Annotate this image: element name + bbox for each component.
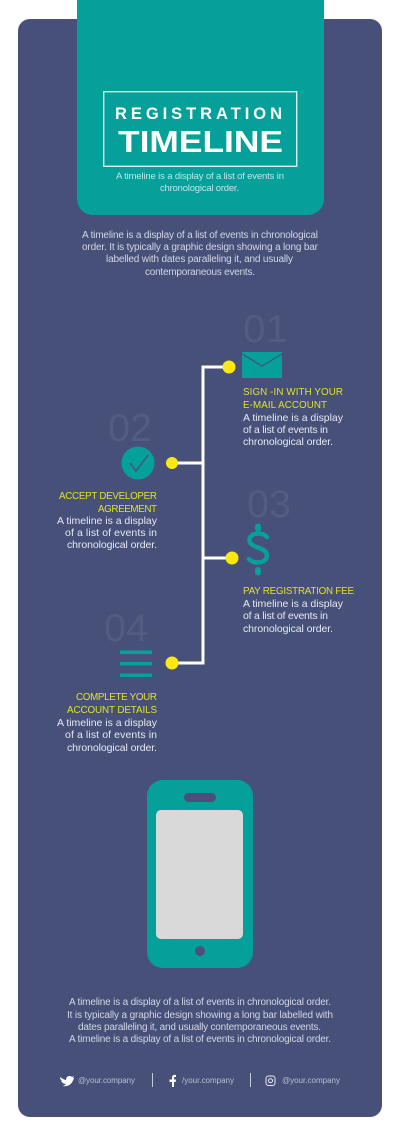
step 03 <box>243 483 354 635</box>
step 03 text: chronological order. <box>243 623 333 635</box>
step 04 text: A timeline is a display <box>57 717 158 729</box>
header subtitle: chronological order. <box>160 183 239 194</box>
step 04 text: COMPLETE YOUR <box>76 692 157 703</box>
intro text: contemporaneous events. <box>145 267 255 278</box>
icon: menu lines <box>120 650 152 677</box>
footer text: dates paralleling it, and usually contemporaneous events. <box>78 1022 321 1033</box>
header subtitle: A timeline is a display of a list of events in <box>116 171 284 182</box>
intro text: order. It is typically a graphic design showing a long bar <box>82 242 319 253</box>
intro text: A timeline is a display of a list of events in chronological <box>82 230 318 241</box>
header subtitle <box>116 171 284 194</box>
step 04 text: of a list of events in <box>65 729 157 741</box>
social bar <box>60 1073 340 1087</box>
icon: check circle <box>122 446 154 480</box>
step 02: 02 <box>108 407 152 450</box>
instagram: @your.company <box>282 1076 340 1085</box>
title box <box>104 92 297 166</box>
step 03 text: PAY REGISTRATION FEE <box>243 586 354 597</box>
facebook <box>170 1075 234 1087</box>
step 01: 01 <box>243 308 288 351</box>
step 01 text: E-MAIL ACCOUNT <box>243 400 327 411</box>
title box: REGISTRATION <box>115 105 282 123</box>
icon: smartphone <box>147 780 253 968</box>
step 02 text: chronological order. <box>67 539 157 551</box>
twitter <box>60 1076 135 1086</box>
timeline dots <box>166 360 238 670</box>
icon: dollar <box>249 526 267 572</box>
step 02 text: of a list of events in <box>65 527 157 539</box>
step 04: 04 <box>104 607 148 650</box>
step 01 text: chronological order. <box>243 436 333 448</box>
step 02 text: AGREEMENT <box>98 504 157 515</box>
step 01 text: SIGN -IN WITH YOUR <box>243 387 343 398</box>
step 04 text: ACCOUNT DETAILS <box>67 705 157 716</box>
step 01 text <box>243 387 344 448</box>
step 03 text: A timeline is a display <box>243 598 344 610</box>
step 03: 03 <box>247 483 291 526</box>
step 02 text: ACCEPT DEVELOPER <box>59 491 157 502</box>
step 04 <box>57 607 158 754</box>
divider <box>152 1073 153 1087</box>
intro text: labelled with dates paralleling it, and usually <box>106 254 293 265</box>
footer text: It is typically a graphic design showing a long bar labelled with <box>67 1010 333 1021</box>
step 01 <box>242 308 344 448</box>
twitter: @your.company <box>78 1076 135 1085</box>
step 04 text: chronological order. <box>67 742 157 754</box>
step 02 <box>57 407 158 551</box>
facebook: /your.company <box>182 1076 234 1085</box>
timeline connector <box>172 367 232 663</box>
intro text <box>82 230 319 278</box>
step 02 text <box>57 491 158 551</box>
step 01 text: of a list of events in <box>243 424 328 436</box>
header panel <box>77 0 324 215</box>
step 04 text <box>57 692 158 754</box>
footer text: A timeline is a display of a list of events in chronological order. <box>69 997 331 1008</box>
step 03 text <box>243 586 354 635</box>
step 01 text: A timeline is a display <box>243 412 344 424</box>
title box: TIMELINE <box>118 124 283 159</box>
step 02 text: A timeline is a display <box>57 515 158 527</box>
divider <box>250 1073 251 1087</box>
step 03 text: of a list of events in <box>243 610 328 622</box>
footer text <box>67 997 333 1045</box>
icon: envelope <box>242 352 282 378</box>
footer text: A timeline is a display of a list of events in chronological order. <box>69 1034 331 1045</box>
